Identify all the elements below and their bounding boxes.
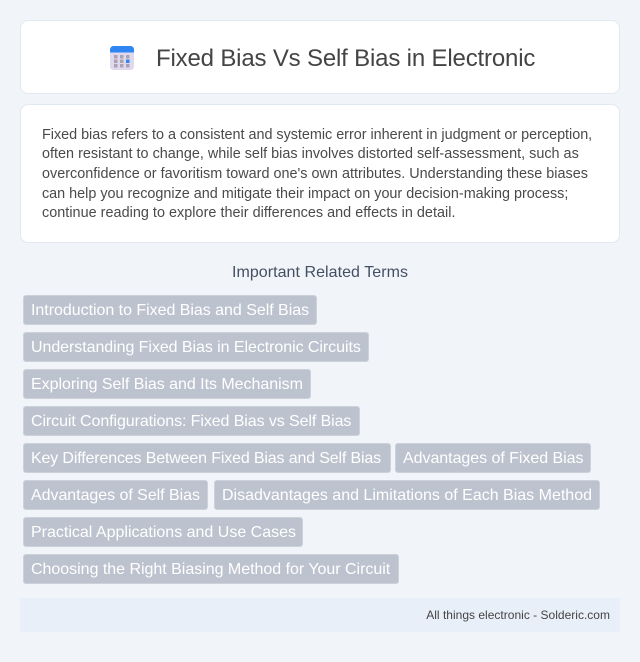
- panel: description: [20, 104, 620, 243]
- footer text: All things electronic - Solderic.com: [426, 608, 610, 622]
- title: Fixed Bias Vs Self Bias in Electronic: [156, 45, 535, 72]
- tag: [23, 443, 391, 473]
- icon: calendar: [110, 46, 134, 70]
- header panel: [20, 20, 620, 94]
- tag: [23, 480, 208, 510]
- tag: Circuit Configurations: Fixed Bias vs Self Bias: [31, 413, 351, 430]
- tag: [23, 369, 311, 399]
- description text: can help you recognize and mitigate their impact on your decision-making process;: [42, 186, 568, 202]
- footer: [20, 598, 620, 632]
- tag: [23, 554, 399, 584]
- tag: [23, 295, 317, 325]
- tag: [214, 480, 600, 510]
- heading: related terms: Important Related Terms: [232, 264, 408, 281]
- tag: Choosing the Right Biasing Method for Your Circuit: [31, 561, 390, 578]
- tag: Advantages of Self Bias: [31, 487, 200, 504]
- tag: Introduction to Fixed Bias and Self Bias: [31, 302, 309, 319]
- tag: [23, 332, 369, 362]
- description text: Fixed bias refers to a consistent and systemic error inherent in judgment or perception,: [42, 126, 592, 142]
- tag: Key Differences Between Fixed Bias and Self Bias: [31, 450, 381, 467]
- tag: Disadvantages and Limitations of Each Bias Method: [222, 487, 592, 504]
- tag: Advantages of Fixed Bias: [403, 450, 583, 467]
- tag: [395, 443, 591, 473]
- description text: overconfidence or favoritism toward one's own attributes. Understanding these biases: [42, 166, 588, 182]
- tag: Practical Applications and Use Cases: [31, 524, 296, 541]
- panel: related terms tags: [23, 295, 600, 584]
- description text: [42, 126, 592, 221]
- tag: [23, 406, 360, 436]
- tag: [23, 517, 303, 547]
- description text: often resistant to change, while self bias involves distorted self-assessment, such as: [42, 146, 579, 162]
- description text: continue reading to explore their differences and effects in detail.: [42, 205, 456, 221]
- tag: Understanding Fixed Bias in Electronic Circuits: [31, 339, 361, 356]
- tag: Exploring Self Bias and Its Mechanism: [31, 376, 303, 393]
